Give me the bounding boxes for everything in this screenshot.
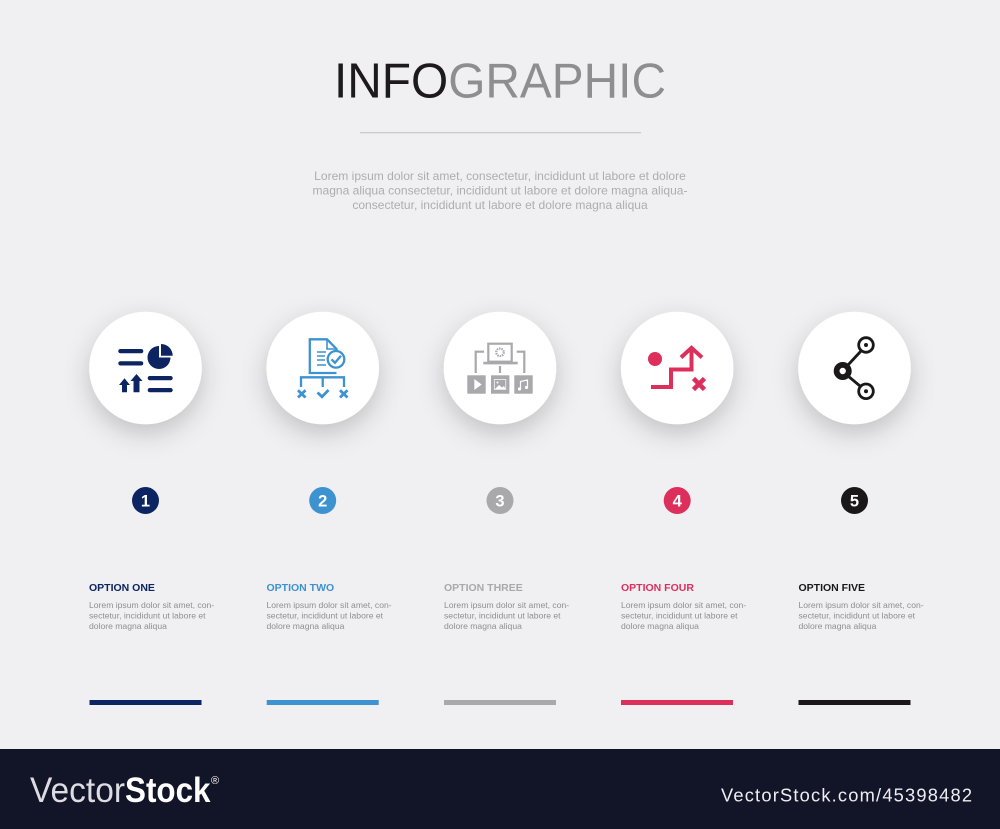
option four text: sectetur, incididunt ut labore et xyxy=(621,610,738,620)
option two text: dolore magna aliqua xyxy=(266,621,345,631)
icon: media network xyxy=(467,344,533,394)
option three text: dolore magna aliqua xyxy=(444,621,522,631)
number badge 4 xyxy=(664,487,691,514)
number badge 1: 1 xyxy=(141,492,150,510)
number badge 1 xyxy=(132,487,159,514)
option five text xyxy=(798,582,924,631)
panel: option one xyxy=(89,312,202,424)
option two text: sectetur, incididunt ut labore et xyxy=(266,610,384,620)
panel: option three xyxy=(444,312,556,424)
option one text xyxy=(89,582,214,631)
bar 1 xyxy=(90,700,202,705)
bar 3 xyxy=(444,700,556,705)
option five text: Lorem ipsum dolor sit amet, con- xyxy=(798,600,924,610)
panel: option two xyxy=(266,312,379,424)
option four text: OPTION FOUR xyxy=(621,582,694,594)
number badge 2: 2 xyxy=(318,492,327,510)
footer image id: VectorStock.com/45398482 xyxy=(721,784,972,806)
number badge 5: 5 xyxy=(850,492,859,510)
option three text: sectetur, incididunt ut labore et xyxy=(444,610,561,620)
icon circle 5 xyxy=(798,312,911,424)
option four text: dolore magna aliqua xyxy=(621,621,699,631)
footer band xyxy=(0,749,1000,829)
bar 5 xyxy=(798,700,910,705)
footer logo: Vector xyxy=(30,771,125,810)
option two text xyxy=(266,582,392,631)
option four text: Lorem ipsum dolor sit amet, con- xyxy=(621,600,746,610)
title: INFOGRAPHIC xyxy=(334,54,666,108)
icon: share nodes xyxy=(837,338,873,399)
option five text: OPTION FIVE xyxy=(798,582,865,594)
option three text: OPTION THREE xyxy=(444,582,523,594)
option five text: dolore magna aliqua xyxy=(798,621,877,631)
option one text: dolore magna aliqua xyxy=(89,621,167,631)
number badge 5 xyxy=(841,487,868,514)
option one text: OPTION ONE xyxy=(89,582,155,594)
number badge 3 xyxy=(486,487,514,514)
option four text xyxy=(621,582,746,631)
number badge 3: 3 xyxy=(495,492,505,510)
option three text: Lorem ipsum dolor sit amet, con- xyxy=(444,600,569,610)
intro text xyxy=(312,169,688,212)
option one text: sectetur, incididunt ut labore et xyxy=(89,610,206,620)
intro text: Lorem ipsum dolor sit amet, consectetur, incididunt ut labore et dolore xyxy=(314,169,686,183)
icon: document review xyxy=(298,339,348,398)
panel: option four xyxy=(621,312,734,424)
icon circle 4 xyxy=(621,312,734,424)
icon circle 1 xyxy=(89,312,202,424)
option one text: Lorem ipsum dolor sit amet, con- xyxy=(89,600,214,610)
option five text: sectetur, incididunt ut labore et xyxy=(798,610,916,620)
option three text xyxy=(444,582,569,631)
intro text: magna aliqua consectetur, incididunt ut labore et dolore magna aliqua- xyxy=(312,184,688,198)
footer logo: ® xyxy=(211,775,219,787)
number badge 2 xyxy=(309,487,336,514)
footer logo xyxy=(30,771,219,810)
number badge 4: 4 xyxy=(673,492,683,510)
option two text: Lorem ipsum dolor sit amet, con- xyxy=(266,600,392,610)
icon: strategy stairs xyxy=(648,348,704,390)
panel: option five xyxy=(798,312,911,424)
icon circle 3 xyxy=(444,312,556,424)
icon: chart and arrows xyxy=(118,344,173,392)
footer logo: Stock xyxy=(125,771,211,810)
option two text: OPTION TWO xyxy=(266,582,334,594)
intro text: consectetur, incididunt ut labore et dolore magna aliqua xyxy=(352,198,648,212)
bar 4 xyxy=(621,700,733,705)
icon circle 2 xyxy=(266,312,379,424)
bar 2 xyxy=(267,700,379,705)
